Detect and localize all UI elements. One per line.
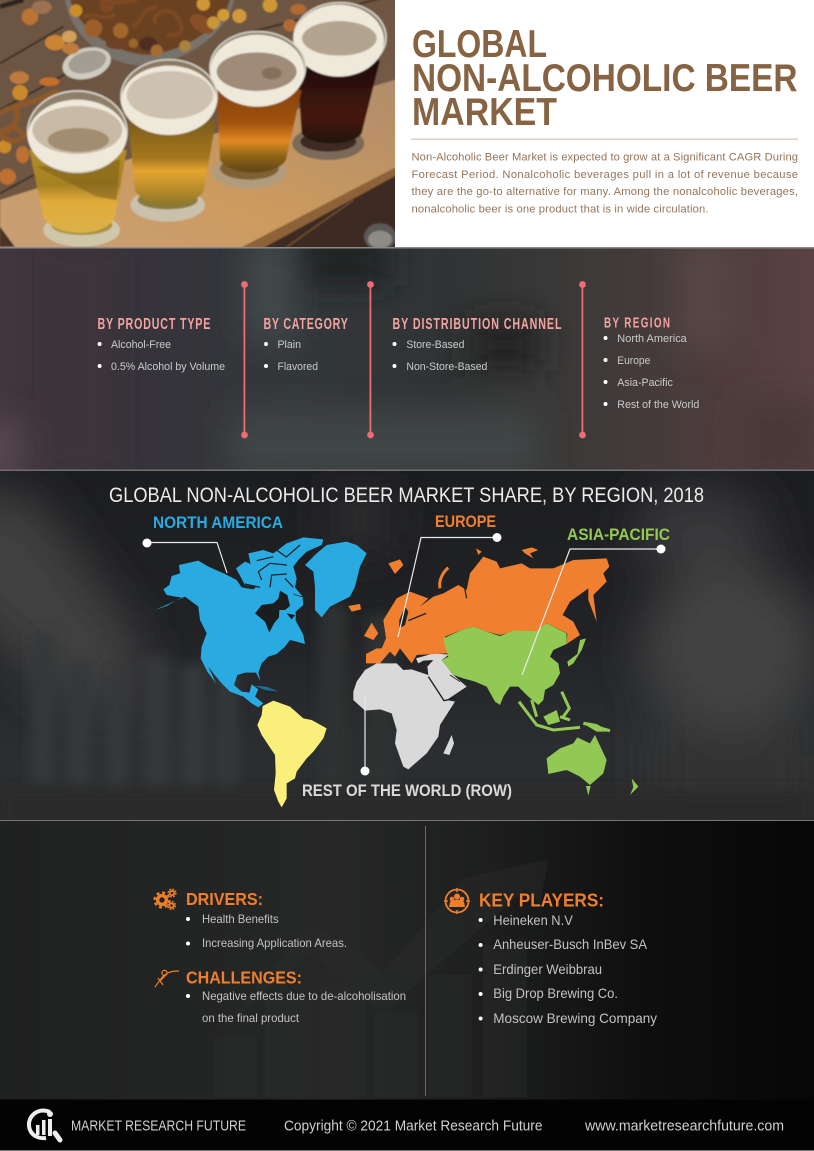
list: key players: Big Drop Brewing Co. xyxy=(493,985,618,1001)
map: north america xyxy=(155,537,367,707)
segment: by category: Plain xyxy=(278,339,301,351)
callout: rest of the world: REST OF THE WORLD (ROW) xyxy=(302,782,512,800)
list: key players xyxy=(479,912,657,1026)
callout: north america xyxy=(142,514,283,573)
list: key players: Anheuser-Busch InBev SA xyxy=(493,936,648,952)
divider: pink line 3 xyxy=(579,281,586,438)
map: asia-pacific xyxy=(442,623,638,796)
segment: by region: Europe xyxy=(617,355,650,367)
list: drivers: Increasing Application Areas. xyxy=(202,936,347,950)
callout: europe: EUROPE xyxy=(435,513,496,531)
glass 4 dark xyxy=(292,132,365,160)
icon: challenges climber xyxy=(155,970,179,987)
panel: drivers, challenges and key players xyxy=(0,821,814,1100)
segment: by category: BY CATEGORY xyxy=(264,315,348,333)
divider: pink line 1 xyxy=(241,281,248,438)
bowl xyxy=(65,0,234,65)
list: challenges: Negative effects due to de-alcoholisation xyxy=(202,989,406,1003)
callout: europe xyxy=(398,513,502,637)
text: website: www.marketresearchfuture.com xyxy=(584,1118,784,1134)
heading: drivers: DRIVERS: xyxy=(186,889,263,909)
list: drivers xyxy=(186,912,347,950)
heading: challenges: CHALLENGES: xyxy=(186,968,302,988)
segment: by distribution channel xyxy=(392,315,561,373)
segment: by region xyxy=(604,315,699,411)
title xyxy=(412,23,798,134)
map: europe and russia xyxy=(348,547,609,663)
map: africa and middle east xyxy=(353,653,467,769)
list: challenges xyxy=(186,989,406,1025)
heading: map title: GLOBAL NON-ALCOHOLIC BEER MARKET SHARE, BY REGION, 2018 xyxy=(109,483,704,507)
callout: asia-pacific: ASIA-PACIFIC xyxy=(567,526,670,544)
heading: key players: KEY PLAYERS: xyxy=(479,890,604,911)
glass 2 xyxy=(130,194,206,222)
segment: by category xyxy=(264,315,348,373)
panel: footer xyxy=(0,1100,814,1151)
intro paragraph: they are the go-to alternative for many. Among the nonalcoholic beverages, xyxy=(412,186,798,198)
segment: by distribution channel: BY DISTRIBUTION CHANNEL xyxy=(392,315,561,333)
title: GLOBAL xyxy=(412,23,547,66)
panel: market segmentation xyxy=(0,235,814,480)
list: challenges: on the final product xyxy=(202,1011,300,1025)
list: key players: Moscow Brewing Company xyxy=(493,1010,657,1026)
divider: pink line 2 xyxy=(367,281,374,438)
callout: north america: NORTH AMERICA xyxy=(153,514,283,532)
map: south america xyxy=(257,701,327,807)
segment: by region: Rest of the World xyxy=(617,399,699,411)
segment: by region: North America xyxy=(617,333,688,345)
panel: title block xyxy=(395,0,814,247)
callout: asia-pacific xyxy=(522,526,670,675)
intro paragraph: nonalcoholic beer is one product that is in wide circulation. xyxy=(412,204,708,216)
icon: key players xyxy=(444,888,470,914)
list: drivers: Health Benefits xyxy=(202,912,279,926)
spoon xyxy=(61,46,112,81)
panel: market share world map xyxy=(0,471,814,830)
segment: by product type xyxy=(98,315,225,373)
segment: by product type: 0.5% Alcohol by Volume xyxy=(111,361,225,373)
segment: by distribution channel: Non-Store-Based xyxy=(406,361,487,373)
panel: hero photo of beer glasses xyxy=(0,0,400,253)
segment: by region: Asia-Pacific xyxy=(617,377,673,389)
segment: by product type: Alcohol-Free xyxy=(111,339,171,351)
icon: logo xyxy=(29,1111,60,1140)
list: key players: Heineken N.V xyxy=(493,912,573,928)
segment: by distribution channel: Store-Based xyxy=(406,339,464,351)
segment: by product type: BY PRODUCT TYPE xyxy=(98,315,210,333)
intro paragraph: Non-Alcoholic Beer Market is expected to grow at a Significant CAGR During xyxy=(412,152,798,164)
title: MARKET xyxy=(412,91,557,134)
icon: gears xyxy=(155,889,176,909)
list: key players: Erdinger Weibbrau xyxy=(493,961,602,977)
segment: by region: BY REGION xyxy=(604,315,670,331)
intro paragraph xyxy=(412,152,798,216)
glass 3 amber xyxy=(212,160,287,190)
callout: rest of the world xyxy=(302,695,512,800)
glass 1 xyxy=(42,220,121,247)
intro paragraph: Forecast Period. Nonalcoholic beverages pull in a lot of revenue because xyxy=(412,169,798,181)
segment: by category: Flavored xyxy=(278,361,318,373)
bottle cap xyxy=(364,223,396,250)
scattered nuts xyxy=(0,0,306,185)
text: brand name: MARKET RESEARCH FUTURE xyxy=(71,1118,246,1134)
text: copyright: Copyright © 2021 Market Research Future xyxy=(284,1118,542,1134)
